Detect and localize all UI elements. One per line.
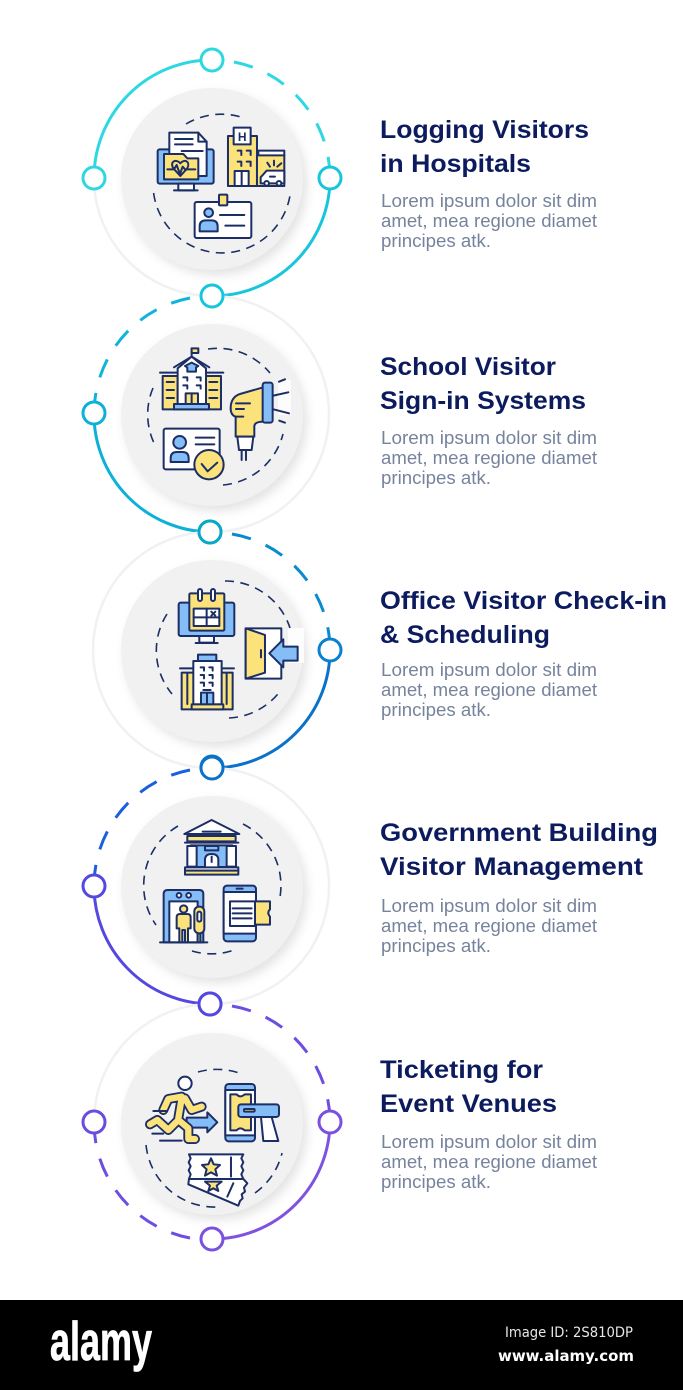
icon: school building xyxy=(160,348,223,409)
icon: handheld scanner xyxy=(231,379,289,460)
icon: security gate xyxy=(160,890,207,942)
arc: step 5 top dashed xyxy=(232,1006,330,1122)
disk: step 4 xyxy=(121,796,303,978)
disk: step 1 xyxy=(121,88,303,270)
arc: step 2 dashed xyxy=(94,298,190,413)
logo: alamy: alamy xyxy=(50,1310,152,1372)
nodes: step 4 xyxy=(83,757,223,1015)
body text: step 1 xyxy=(381,191,597,251)
heading: step 3 xyxy=(380,587,667,649)
heading: step 3: Office Visitor Check-in xyxy=(380,587,667,615)
heading: step 2 xyxy=(380,353,586,415)
arc: step 1 dashed xyxy=(234,62,330,178)
nodes: step 2 xyxy=(83,285,223,543)
panel: school visitor sign-in systems xyxy=(83,285,597,543)
body text: step 4: Lorem ipsum dolor sit dim xyxy=(381,896,597,916)
body text: step 2: principes atk. xyxy=(381,468,491,488)
heading: step 3: & Scheduling xyxy=(380,621,550,649)
disk: step 5 xyxy=(121,1033,303,1215)
arc: step 4 solid xyxy=(94,886,210,1004)
body text: step 2 xyxy=(381,428,597,488)
body text: step 3 xyxy=(381,660,597,720)
panel: government building visitor management xyxy=(83,757,658,1015)
heading: step 1: in Hospitals xyxy=(380,150,531,178)
panel: ticketing for event venues xyxy=(83,993,597,1250)
body text: step 4 xyxy=(381,896,597,956)
icon: mobile ticket xyxy=(224,886,270,941)
icon: running visitor xyxy=(150,1077,217,1141)
site url: www.alamy.com xyxy=(498,1347,634,1365)
heading: step 4 xyxy=(380,819,658,881)
panel: office visitor check-in and scheduling xyxy=(93,521,667,778)
body text: step 5: amet, mea regione diamet xyxy=(381,1152,597,1172)
body text: step 3: principes atk. xyxy=(381,700,491,720)
body text: step 1: Lorem ipsum dolor sit dim xyxy=(381,191,597,211)
nodes: step 3 xyxy=(199,521,341,778)
arc: step 4 dashed xyxy=(94,770,190,886)
dashed ring: step 4 xyxy=(144,824,281,954)
icon: hospital records: H xyxy=(238,130,246,144)
arc: step 1 upper left xyxy=(94,60,212,178)
dashed ring: step 2 xyxy=(148,348,283,485)
heading: step 2: Sign-in Systems xyxy=(380,387,586,415)
icon: entry door with arrow xyxy=(246,628,298,679)
icon: calendar on monitor xyxy=(179,589,234,643)
nodes: step 1 xyxy=(83,49,341,189)
icon: verified id card xyxy=(164,429,224,479)
arc: step 5 solid xyxy=(212,1122,330,1239)
arc: step 3 dashed xyxy=(232,534,330,650)
arc: step 1 lower right xyxy=(212,178,330,296)
body text: step 5 xyxy=(381,1132,597,1192)
disk: step 2 xyxy=(121,324,303,506)
icon: hospital records xyxy=(158,128,284,238)
arc: step 5 bottom dashed xyxy=(94,1122,190,1238)
icon: event tickets xyxy=(188,1154,247,1206)
body text: step 3: amet, mea regione diamet xyxy=(381,680,597,700)
body text: step 4: amet, mea regione diamet xyxy=(381,916,597,936)
body text: step 1: amet, mea regione diamet xyxy=(381,211,597,231)
body text: step 2: amet, mea regione diamet xyxy=(381,448,597,468)
icon: phone ticket scanner xyxy=(225,1084,279,1141)
panel: logging visitors in hospitals xyxy=(83,49,597,296)
heading: step 5: Ticketing for xyxy=(380,1056,543,1084)
body text: step 5: principes atk. xyxy=(381,1172,491,1192)
body text: step 2: Lorem ipsum dolor sit dim xyxy=(381,428,597,448)
heading: step 5: Event Venues xyxy=(380,1090,557,1118)
nodes: step 5 xyxy=(83,993,341,1250)
dashed ring: step 3 xyxy=(156,581,290,718)
heading: step 5 xyxy=(380,1056,557,1118)
heading: step 1 xyxy=(380,116,589,178)
heading: step 1: Logging Visitors xyxy=(380,116,589,144)
image id: Image ID: 2S810DP xyxy=(505,1325,633,1341)
heading: step 4: Visitor Management xyxy=(380,853,644,881)
icon: office building xyxy=(180,655,234,709)
body text: step 5: Lorem ipsum dolor sit dim xyxy=(381,1132,597,1152)
footer: watermark bar xyxy=(0,1300,683,1390)
dashed ring: step 1 xyxy=(154,114,290,253)
arc: step 3 solid xyxy=(212,650,330,768)
dashed ring: step 5 xyxy=(146,1069,282,1207)
body text: step 3: Lorem ipsum dolor sit dim xyxy=(381,660,597,680)
heading: step 4: Government Building xyxy=(380,819,658,847)
arc: step 2 solid xyxy=(94,413,210,532)
body text: step 1: principes atk. xyxy=(381,231,491,251)
body text: step 4: principes atk. xyxy=(381,936,491,956)
heading: step 2: School Visitor xyxy=(380,353,556,381)
disk: step 3 xyxy=(121,560,303,742)
icon: government building xyxy=(184,820,239,875)
